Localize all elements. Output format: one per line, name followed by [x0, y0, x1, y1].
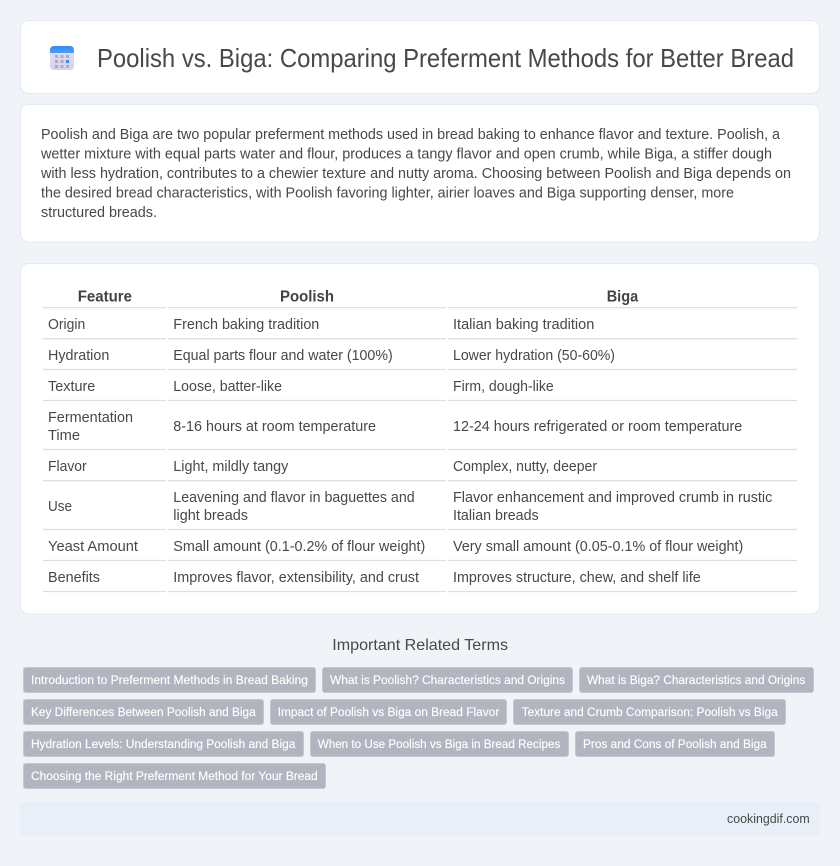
heading: related terms: Important Related Terms — [332, 637, 508, 654]
table row: fermentation time: 8-16 hours at room temperature — [173, 419, 376, 435]
tag — [270, 700, 506, 724]
panel: title header — [20, 20, 820, 94]
table row: use: Italian breads — [453, 508, 539, 524]
table row: use: Use — [48, 499, 72, 515]
panel: introduction — [20, 104, 820, 242]
table row: origin — [43, 317, 797, 339]
table row: hydration: Equal parts flour and water (100%) — [173, 348, 393, 364]
panel: comparison table — [20, 264, 820, 614]
table row: origin: Origin — [48, 317, 85, 333]
table row: benefits: Improves structure, chew, and shelf life — [453, 570, 701, 586]
tag — [310, 732, 568, 756]
tag: Choosing the Right Preferment Method for Your Bread — [31, 769, 318, 783]
table row: texture — [43, 379, 797, 400]
table row: flavor — [43, 459, 797, 481]
table row: hydration: Hydration — [48, 348, 109, 364]
table header row: Poolish — [280, 289, 334, 306]
tag: What is Poolish? Characteristics and Origins — [330, 673, 565, 687]
table header row: Biga — [607, 289, 639, 306]
tag — [24, 764, 326, 788]
table row: use — [43, 490, 797, 530]
table row: hydration — [43, 348, 797, 370]
table row: texture: Texture — [48, 379, 95, 395]
tag — [24, 700, 264, 724]
tag — [24, 668, 316, 692]
table row: fermentation time: Time — [48, 428, 80, 444]
table row: texture: Loose, batter-like — [173, 379, 282, 395]
table row: use: Leavening and flavor in baguettes and — [173, 490, 415, 506]
tag — [514, 700, 786, 724]
table row: yeast amount: Yeast Amount — [48, 539, 138, 555]
text block: introduction paragraph — [40, 127, 791, 221]
table row: yeast amount: Very small amount (0.05-0.1% of flour weight) — [453, 539, 743, 555]
tag: Key Differences Between Poolish and Biga — [31, 705, 256, 719]
table header row — [43, 289, 797, 308]
text block: introduction paragraph: with less hydration, contributes to a chewier texture and nutty aroma. Choosing between Poolish and Biga depends on — [40, 166, 791, 182]
tag — [322, 668, 572, 692]
table row: origin: French baking tradition — [173, 317, 319, 333]
tag — [580, 668, 814, 692]
table row: texture: Firm, dough-like — [453, 379, 554, 395]
tag: Impact of Poolish vs Biga on Bread Flavor — [278, 705, 499, 719]
tag: Introduction to Preferment Methods in Bread Baking — [31, 673, 308, 687]
text block: introduction paragraph: Poolish and Biga are two popular preferment methods used in bread baking to enhance flavor and texture. Poolish, a — [41, 127, 780, 143]
table row: fermentation time: 12-24 hours refrigerated or room temperature — [453, 419, 742, 435]
icon: calendar — [50, 46, 74, 70]
tag: Texture and Crumb Comparison: Poolish vs Biga — [522, 705, 778, 719]
table header row: Feature — [78, 289, 132, 306]
table row: flavor: Flavor — [48, 459, 87, 475]
table row: flavor: Complex, nutty, deeper — [453, 459, 597, 475]
table row: benefits — [43, 570, 797, 592]
text block: introduction paragraph: the desired bread characteristics, with Poolish favoring lighter, airier loaves and Biga supporting denser, more — [41, 186, 734, 202]
related term tags — [24, 668, 814, 788]
table row: use: Flavor enhancement and improved crumb in rustic — [453, 490, 772, 506]
title: Poolish vs. Biga: Comparing Preferment Methods for Better Bread — [97, 45, 794, 73]
tag — [24, 732, 304, 756]
tag: What is Biga? Characteristics and Origins — [587, 673, 805, 687]
table row: yeast amount — [43, 539, 797, 560]
table row: benefits: Improves flavor, extensibility, and crust — [173, 570, 419, 586]
table row: hydration: Lower hydration (50-60%) — [453, 348, 615, 364]
table row: yeast amount: Small amount (0.1-0.2% of flour weight) — [173, 539, 425, 555]
tag: Hydration Levels: Understanding Poolish and Biga — [31, 737, 295, 751]
text block: introduction paragraph: structured breads. — [41, 205, 157, 221]
table row: flavor: Light, mildly tangy — [173, 459, 289, 475]
table row: fermentation time — [43, 410, 797, 450]
table row: use: light breads — [173, 508, 248, 524]
text block: introduction paragraph: wetter mixture with equal parts water and flour, produces a tangy flavor and open crumb, while Biga, a stiffer dough — [40, 146, 772, 162]
tag — [576, 732, 774, 756]
tag: When to Use Poolish vs Biga in Bread Recipes — [318, 737, 560, 751]
table row: benefits: Benefits — [48, 570, 100, 586]
table row: origin: Italian baking tradition — [453, 317, 594, 333]
footer bar — [20, 802, 820, 836]
footer bar: cookingdif.com — [727, 812, 810, 826]
table row: fermentation time: Fermentation — [48, 410, 133, 426]
tag: Pros and Cons of Poolish and Biga — [583, 737, 767, 751]
